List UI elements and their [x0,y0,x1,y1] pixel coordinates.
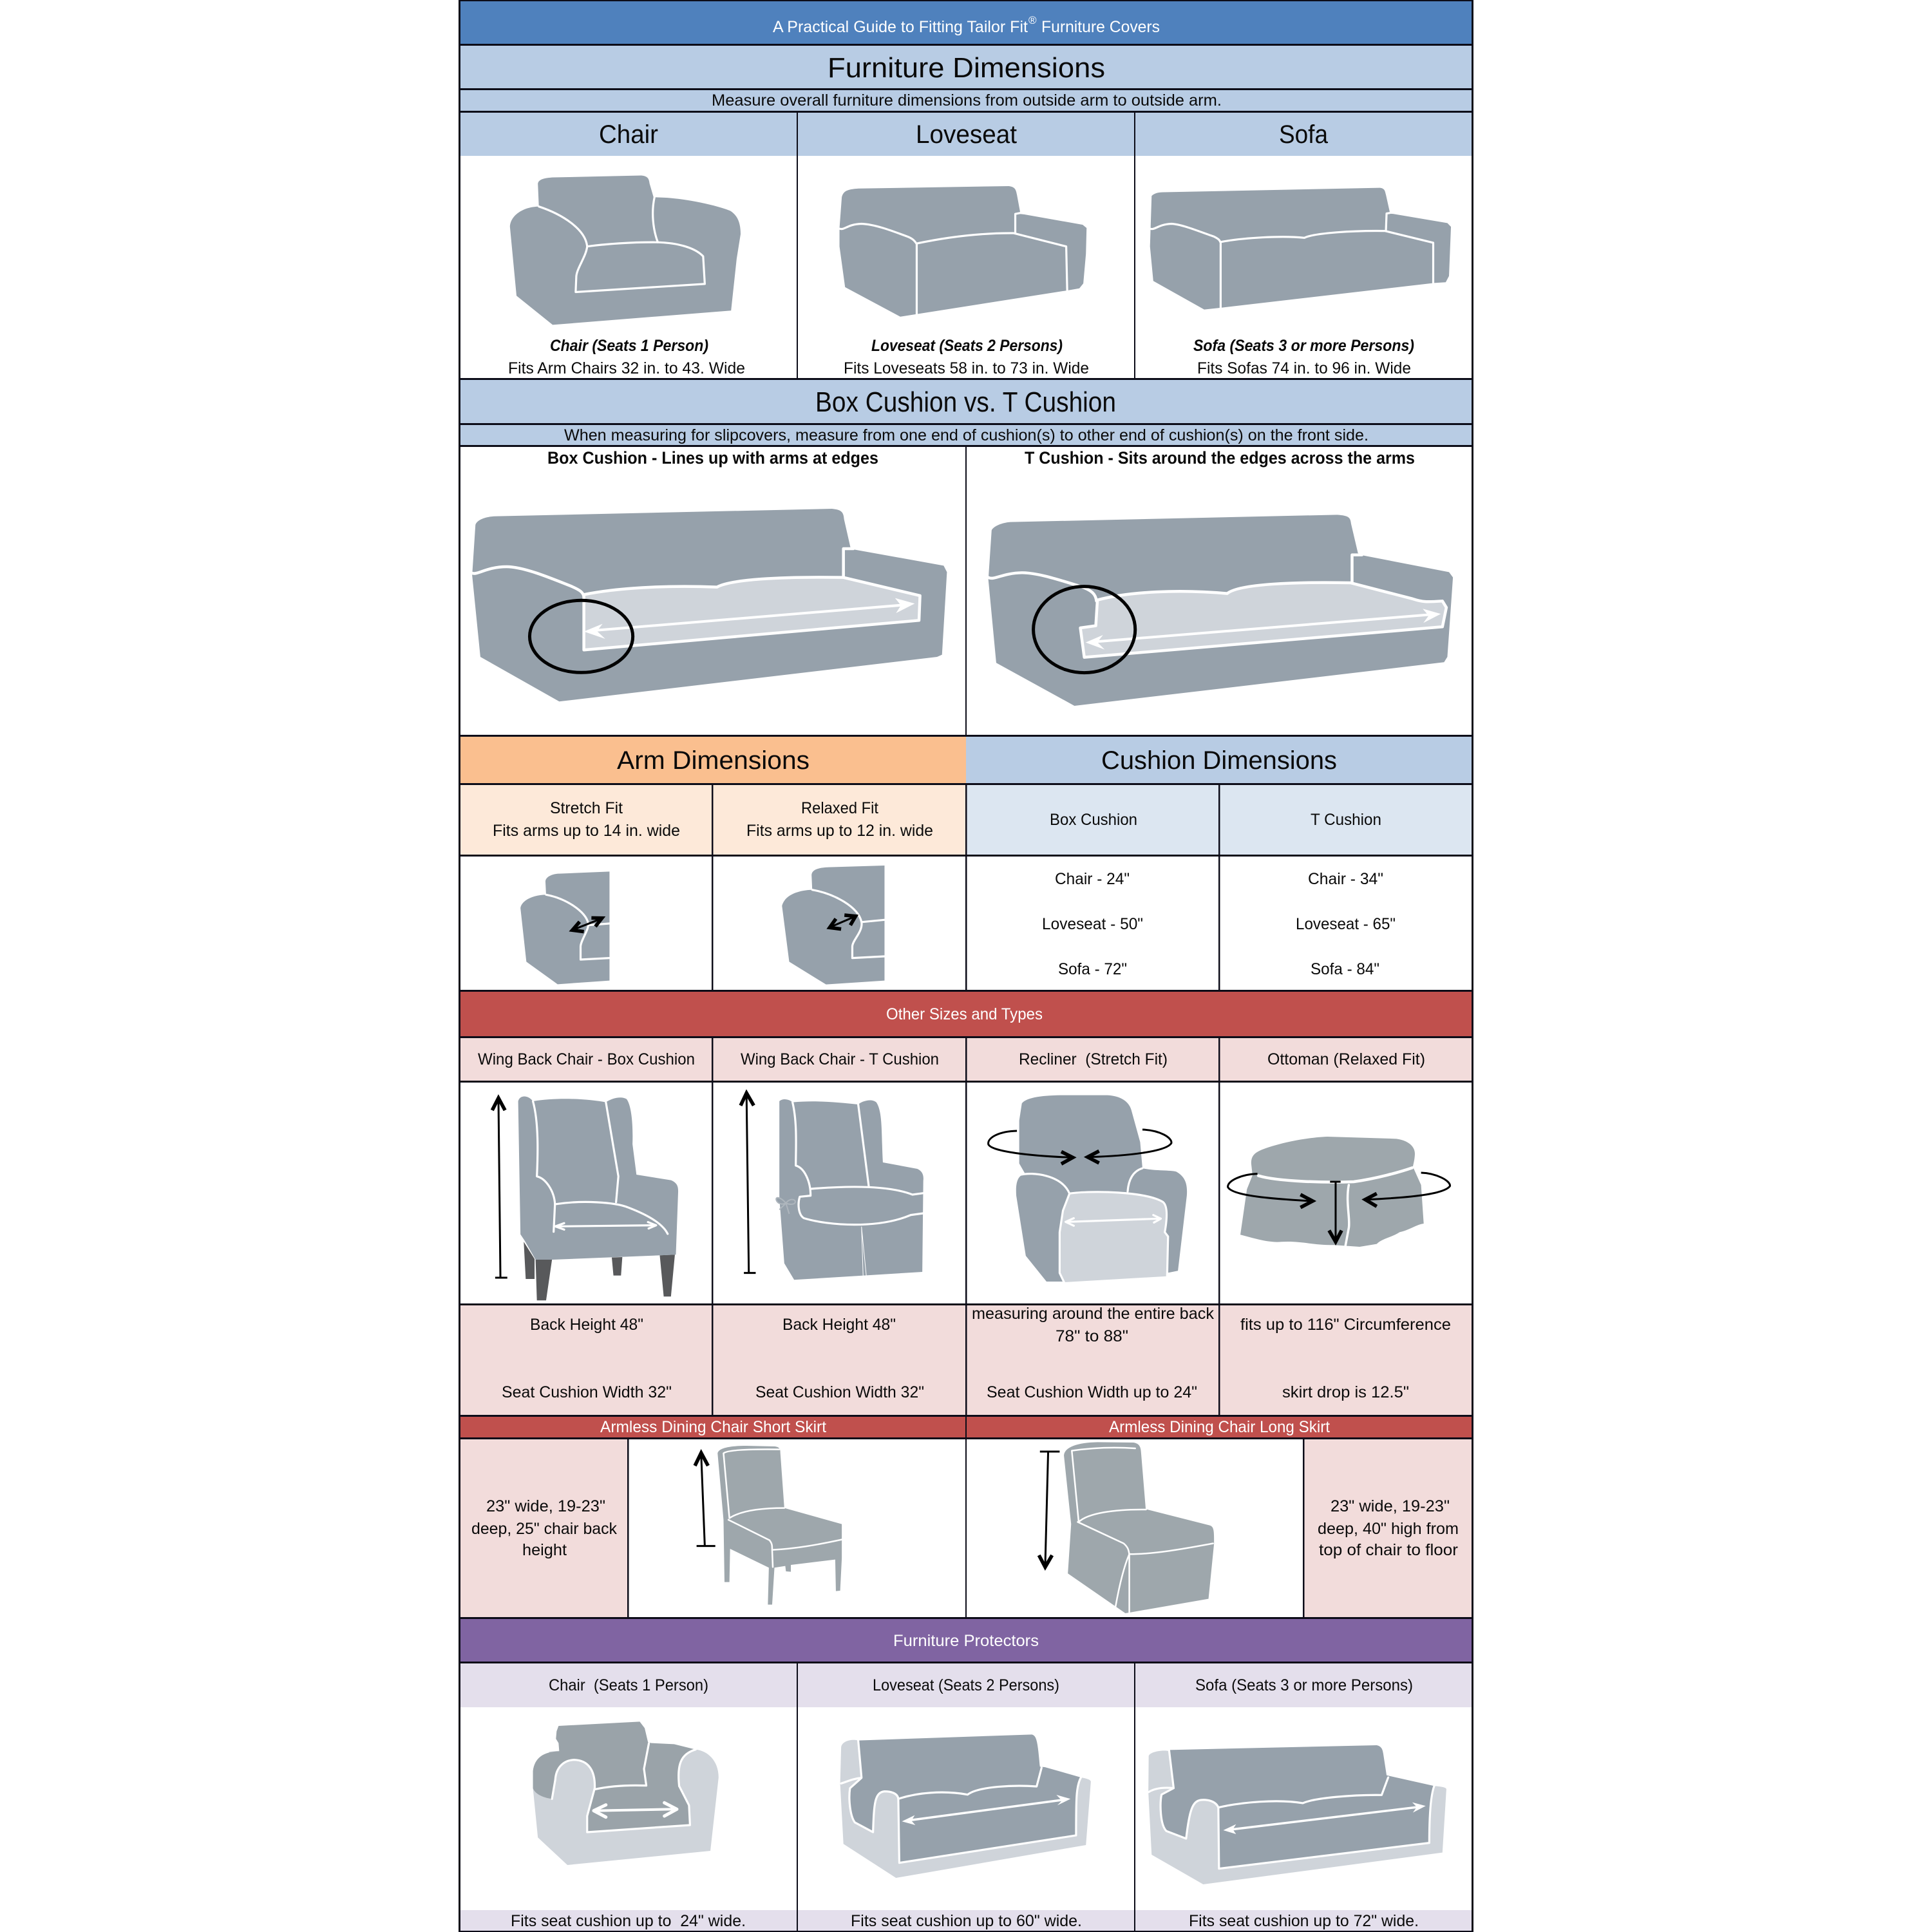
icon: dining chair short skirt [695,1446,842,1605]
text: t cushion column [1296,811,1396,978]
panel: long skirt dimensions: 23" wide, 19-23" [1331,1497,1450,1515]
text: t cushion column: Chair - 34" [1308,870,1383,888]
text: wing back t details: Seat Cushion Width 32" [755,1383,924,1401]
text: relaxed fit [746,799,933,840]
text: box cushion column: Box Cushion [1050,811,1137,829]
icon: chair [510,175,741,325]
heading: arm dimensions: Arm Dimensions [617,746,810,775]
text: loveseat fit: Loveseat (Seats 2 Persons) [871,337,1063,355]
text: relaxed fit: Fits arms up to 12 in. wide [746,822,933,840]
text: wing back t details: Back Height 48" [782,1316,896,1334]
title banner: ® [1028,14,1037,26]
icon: wing back chair box cushion [492,1096,678,1300]
text: ottoman details [1240,1316,1451,1401]
heading: other sizes and types: Other Sizes and Types [886,1005,1043,1023]
text: recliner details [972,1305,1215,1401]
panel: furniture dimensions [459,44,1472,156]
heading: furniture dimensions: Furniture Dimensions [828,52,1105,84]
text: chair fit: Chair (Seats 1 Person) [550,337,708,355]
text: recliner details: 78" to 88" [1056,1327,1128,1345]
panel: cushion dimensions [966,736,1472,978]
text: box cushion column: Sofa - 72" [1058,960,1127,978]
text: wing back box details: Back Height 48" [530,1316,643,1334]
heading: sofa: Sofa [1279,120,1329,149]
panel: armless dining headers [459,1416,1472,1438]
text: t cushion column: Sofa - 84" [1311,960,1379,978]
text: loveseat fit: Fits Loveseats 58 in. to 73 in. Wide [844,359,1089,377]
text: t cushion column: T Cushion [1311,811,1381,829]
text: box cushion column [1042,811,1143,978]
panel: other type labels: Recliner (Stretch Fit) [1019,1050,1168,1068]
heading: box cushion caption: Box Cushion - Lines up with arms at edges [547,448,878,468]
panel: box cushion vs t cushion header [459,379,1472,446]
icon: dining chair long skirt [1039,1442,1214,1613]
text: box cushion column: Loveseat - 50" [1042,915,1143,933]
text: stretch fit: Stretch Fit [550,799,623,817]
panel: other sizes and types header [459,991,1472,1037]
panel: other type labels [459,1038,1472,1081]
heading: loveseat: Loveseat [916,120,1017,149]
icon: ottoman [1228,1137,1450,1247]
text: sofa fit: Fits Sofas 74 in. to 96 in. Wide [1197,359,1411,377]
text: stretch fit [493,799,680,840]
icon: t cushion sofa [989,515,1453,706]
panel: other type labels: Ottoman (Relaxed Fit) [1267,1050,1425,1068]
panel: long skirt dimensions: deep, 40" high from [1318,1520,1459,1538]
text: chair fit: Fits Arm Chairs 32 in. to 43. Wide [508,359,745,377]
panel: short skirt dimensions: height [522,1541,567,1559]
icon: chair protector [533,1721,719,1865]
text: recliner details: measuring around the entire back [972,1305,1215,1323]
text: sofa fit [1193,337,1414,377]
panel: other type details [459,1305,1472,1415]
icon: loveseat [840,186,1086,317]
panel: armless dining headers: Armless Dining Chair Short Skirt [600,1418,826,1436]
text: t cushion column: Loveseat - 65" [1296,915,1396,933]
text: chair fit [508,337,745,377]
panel: short skirt dimensions: 23" wide, 19-23" [486,1497,605,1515]
heading: furniture protectors: Furniture Protectors [893,1632,1039,1650]
panel: furniture protectors header [459,1618,1472,1662]
title banner: Furniture Covers [1041,18,1160,36]
icon: box cushion sofa [472,509,947,701]
panel: protector labels: Loveseat (Seats 2 Persons) [873,1676,1059,1694]
text: stretch fit: Fits arms up to 14 in. wide [493,822,680,840]
icon: stretch fit arm [520,871,609,984]
text: box cushion column: Chair - 24" [1055,870,1130,888]
text: ottoman details: fits up to 116" Circumference [1240,1316,1451,1334]
panel: other type labels: Wing Back Chair - Box Cushion [478,1050,695,1068]
panel: short skirt dimensions [459,1439,628,1618]
panel: protector labels [459,1663,1472,1707]
panel: long skirt dimensions [1303,1439,1472,1618]
icon: recliner [989,1095,1187,1283]
icon: wing back chair t cushion [741,1093,923,1280]
heading: cushion dimensions: Cushion Dimensions [1101,746,1337,775]
text: measure instruction: Measure overall furniture dimensions from outside arm to outside arm. [712,91,1222,109]
panel: protector labels: Chair (Seats 1 Person) [549,1676,708,1694]
icon: sofa [1150,188,1451,310]
icon: relaxed fit arm [782,866,884,985]
panel: long skirt dimensions: top of chair to floor [1319,1541,1458,1559]
heading: chair: Chair [599,120,658,149]
heading: t cushion caption: T Cushion - Sits around the edges across the arms [1025,448,1415,468]
panel: protector fit labels: Fits seat cushion up to 24" wide. [511,1912,746,1930]
text: wing back box details: Seat Cushion Width 32" [502,1383,672,1401]
panel: protector fit labels: Fits seat cushion up to 60" wide. [851,1912,1082,1930]
text: wing back box details [502,1316,672,1401]
heading: box cushion vs t cushion: Box Cushion vs. T Cushion [815,386,1116,418]
icon: loveseat protector [840,1734,1091,1878]
text: sofa fit: Sofa (Seats 3 or more Persons) [1193,337,1414,355]
title banner [459,0,1472,44]
text: relaxed fit: Relaxed Fit [801,799,878,817]
text: recliner details: Seat Cushion Width up to 24" [987,1383,1197,1401]
icon: sofa protector [1148,1745,1446,1884]
title banner: A Practical Guide to Fitting Tailor Fit [773,18,1028,36]
panel: other type labels: Wing Back Chair - T Cushion [741,1050,939,1068]
panel: arm dimensions [459,736,966,855]
panel: armless dining headers: Armless Dining Chair Long Skirt [1109,1418,1330,1436]
text: wing back t details [755,1316,924,1401]
text: slipcover instruction: When measuring for slipcovers, measure from one end of cushion(s) to other end of cushion(s) on the front side. [564,426,1368,444]
panel: protector fit labels: Fits seat cushion up to 72" wide. [1189,1912,1419,1930]
text: loveseat fit [844,337,1089,377]
text: ottoman details: skirt drop is 12.5" [1282,1383,1409,1401]
panel: protector labels: Sofa (Seats 3 or more Persons) [1195,1676,1413,1694]
panel: protector fit labels [459,1910,1472,1931]
panel: short skirt dimensions: deep, 25" chair back [471,1520,617,1538]
